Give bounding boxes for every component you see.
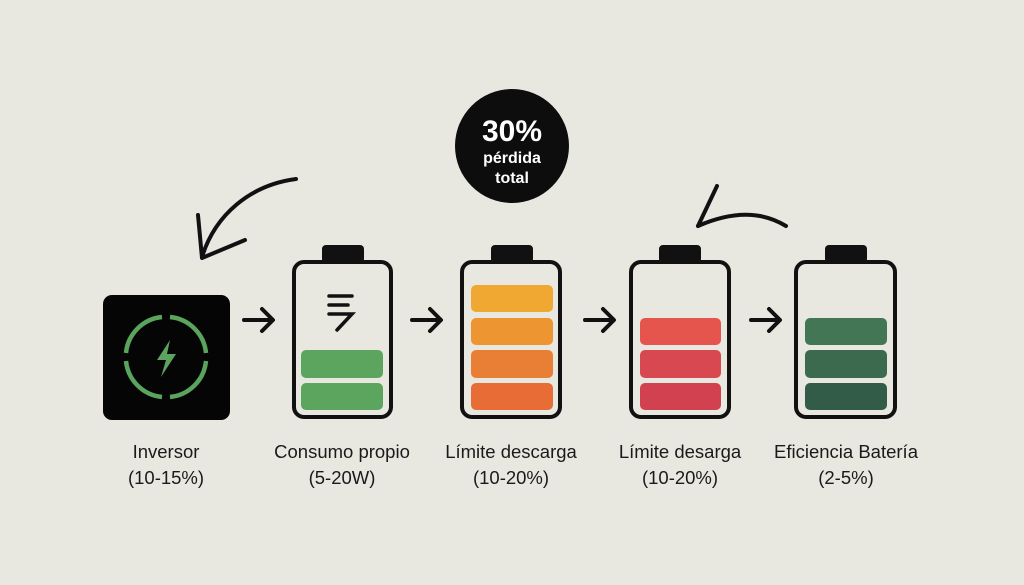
- label: inversor: (10-15%): [128, 467, 204, 488]
- label: limite descarga: (10-20%): [473, 467, 549, 488]
- label: eficiencia bateria: (2-5%): [818, 467, 874, 488]
- arrow: curved left: [198, 179, 296, 258]
- arrow: curved right: [698, 186, 786, 226]
- badge: total loss: 30%: [482, 115, 542, 148]
- label: consumo propio: Consumo propio: [274, 441, 410, 462]
- label: limite desarga: (10-20%): [642, 467, 718, 488]
- badge: total loss: [455, 89, 569, 203]
- label: eficiencia bateria: Eficiencia Batería: [774, 441, 918, 462]
- inverter icon: [103, 295, 230, 420]
- battery 3: limite desarga: [631, 245, 729, 417]
- badge: total loss: total: [495, 170, 529, 187]
- label: inversor: [128, 441, 204, 488]
- label: limite descarga: Límite descarga: [445, 441, 577, 462]
- label: limite desarga: [619, 441, 742, 488]
- battery 4: eficiencia: [796, 245, 895, 417]
- badge: total loss: pérdida: [483, 150, 541, 167]
- label: limite descarga: [445, 441, 577, 488]
- label: eficiencia bateria: [774, 441, 918, 488]
- battery 1: consumo propio: [294, 245, 391, 417]
- arrows: flow: [244, 309, 780, 331]
- label: limite desarga: Límite desarga: [619, 441, 741, 462]
- label: consumo propio: (5-20W): [309, 467, 375, 488]
- label: inversor: Inversor: [133, 441, 199, 462]
- label: consumo propio: [274, 441, 410, 488]
- battery 2: limite descarga: [462, 245, 560, 417]
